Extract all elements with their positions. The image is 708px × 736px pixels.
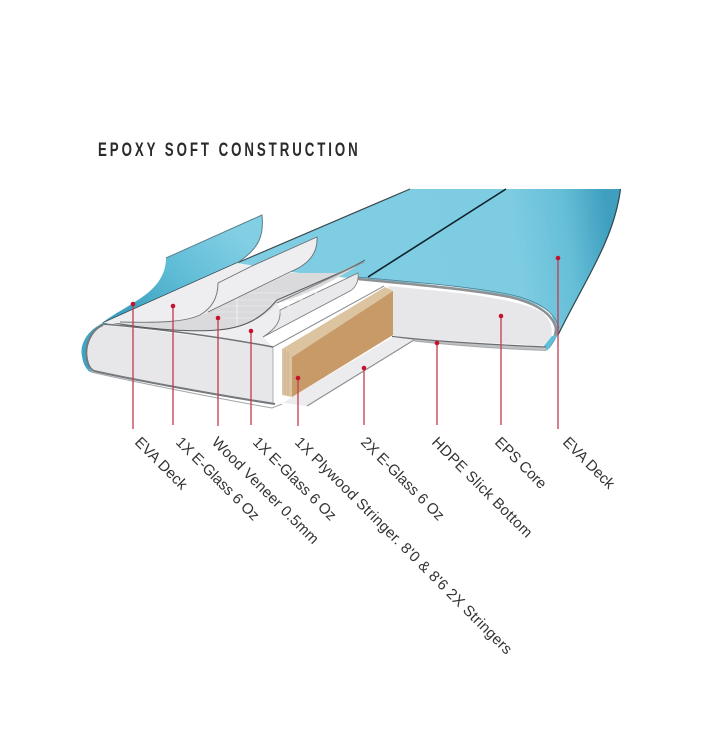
top edge of deck — [237, 189, 410, 263]
callout: EPS Core — [499, 314, 503, 425]
panel: EPS core right — [388, 286, 552, 346]
panel: bottom 2X E-glass strip — [283, 337, 414, 406]
panel: EPS core left — [87, 325, 273, 403]
left laminate edge — [86, 325, 275, 404]
callout: 1X E-Glass upper — [171, 304, 175, 425]
panel: main blue EVA deck — [237, 189, 620, 350]
panel: white glass sheet above stringer — [263, 280, 383, 347]
label: Plywood Stringer: 1X Plywood Stringer. 8'0 & 8'6 2X Stringers — [291, 434, 515, 658]
label: Wood Veneer: Wood Veneer 0.5mm — [208, 434, 322, 548]
label: EVA Deck right: EVA Deck — [559, 434, 618, 493]
callout: EVA Deck right — [556, 256, 560, 429]
deck laminate edge right — [358, 279, 556, 348]
right edge of deck — [558, 189, 620, 335]
blue wrap bottom corner — [544, 335, 558, 351]
panel: wood veneer sheet — [120, 260, 365, 331]
panel: lower E-glass sheet — [103, 303, 280, 347]
label: 1X E-Glass upper: 1X E-Glass 6 Oz — [172, 434, 263, 524]
deck centre line — [368, 189, 506, 277]
panel: HDPE slick bottom — [392, 336, 546, 350]
label: EPS Core: EPS Core — [491, 434, 550, 492]
callout: EVA Deck left — [131, 302, 135, 429]
callout: 2X E-Glass — [362, 366, 366, 425]
panel: upper E-glass sheet — [103, 237, 317, 323]
board cutaway illustration — [82, 189, 620, 408]
label: 1X E-Glass lower: 1X E-Glass 6 Oz — [249, 434, 340, 524]
label: HDPE Slick Bottom: HDPE Slick Bottom — [428, 434, 536, 541]
label: EVA Deck left: EVA Deck — [131, 434, 191, 494]
panel: blue flap, peeled deck — [82, 215, 262, 372]
labels — [131, 434, 618, 658]
callout: Wood Veneer — [216, 316, 220, 426]
callout: 1X E-Glass lower — [249, 329, 253, 425]
callout: HDPE Slick Bottom — [435, 341, 439, 425]
blue wrap at left rail — [82, 322, 110, 373]
callout: Plywood Stringer — [296, 376, 300, 426]
title: EPOXY SOFT CONSTRUCTION — [98, 138, 358, 161]
panel: plywood stringer — [282, 287, 393, 397]
label: 2X E-Glass: 2X E-Glass 6 Oz — [357, 434, 448, 524]
callout lines — [131, 256, 560, 429]
